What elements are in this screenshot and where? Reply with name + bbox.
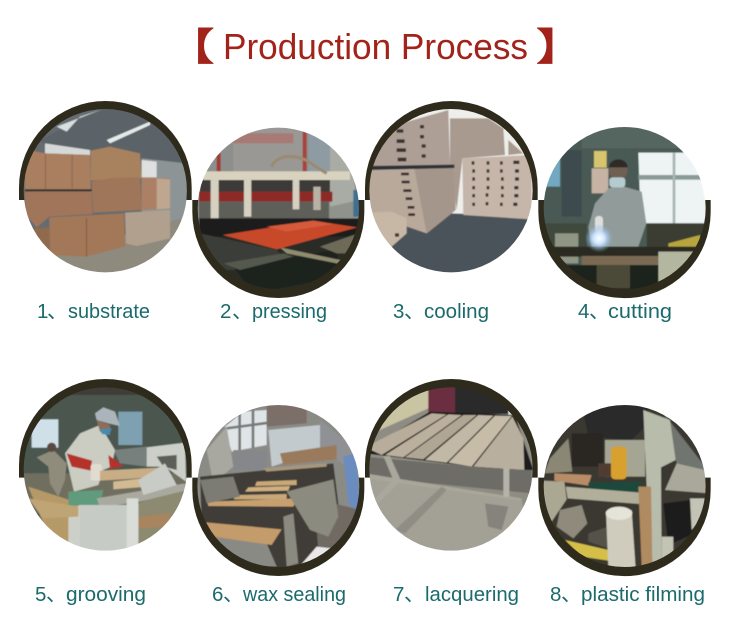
title: 】 — [536, 26, 583, 69]
panel: step 5 grooving — [19, 379, 193, 606]
label: step 3: cooling — [424, 300, 489, 323]
photo ring: step 2 — [192, 200, 364, 298]
label: step 4: 4 — [578, 300, 589, 323]
label: step 3: 、 — [404, 300, 424, 323]
label: step 5: grooving — [66, 583, 146, 606]
panel: step 7 lacquering — [365, 379, 538, 606]
label: step 2: 2 — [220, 300, 231, 323]
label: step 7: lacquering — [425, 583, 519, 606]
label: step 5: 5 — [35, 583, 46, 606]
panel: step 8 plastic filming — [538, 403, 712, 606]
photo ring: step 8 — [538, 478, 711, 576]
label: step 1: substrate — [68, 300, 150, 323]
label: step 3: 3 — [393, 300, 404, 323]
label: step 4 — [578, 300, 672, 323]
panel: step 1 substrate — [19, 101, 193, 323]
photo ring: step 6 — [192, 478, 364, 576]
title: 【 — [167, 26, 214, 69]
label: step 2: 、 — [232, 300, 252, 323]
photo: hot press machine — [197, 125, 362, 297]
label: step 8: plastic filming — [581, 583, 705, 606]
photo ring: step 5 — [19, 379, 192, 478]
panel: step 2 pressing — [192, 125, 364, 323]
label: step 8: 8 — [550, 583, 561, 606]
photo: stacks of cooling boards — [365, 107, 538, 277]
label: step 4: cutting — [608, 300, 672, 323]
photo: plastic filming machine — [542, 403, 712, 573]
photo ring: step 4 — [538, 200, 711, 298]
label: step 3 — [393, 300, 489, 323]
label: step 2 — [220, 300, 327, 323]
photo: wax sealing machines — [197, 403, 362, 573]
title: Production Process — [223, 26, 528, 67]
photo ring: step 7 — [365, 379, 538, 478]
label: step 6: 6 — [212, 583, 223, 606]
label: step 7: 7 — [393, 583, 404, 606]
label: step 1: 、 — [47, 300, 68, 323]
label: step 1: 1 — [37, 300, 48, 323]
photo ring: step 1 — [19, 101, 192, 200]
photo: lacquered planks on rack — [365, 385, 538, 557]
photo: worker at grooving machine — [20, 385, 193, 555]
label: step 6: wax sealing — [242, 583, 346, 606]
label: step 2: pressing — [252, 300, 327, 323]
panel: step 4 cutting — [538, 125, 712, 323]
label: step 4: 、 — [589, 300, 610, 323]
label: step 8: 、 — [561, 583, 582, 606]
photo: stacked boards in warehouse — [24, 109, 187, 272]
label: step 7: 、 — [404, 583, 424, 606]
panel: step 6 wax sealing — [192, 403, 364, 606]
label: step 6: 、 — [223, 583, 244, 606]
label: step 5: 、 — [46, 583, 66, 606]
panel: step 3 cooling — [365, 101, 538, 323]
photo ring: step 3 — [365, 101, 538, 200]
photo: worker at cutting machine — [542, 125, 712, 297]
